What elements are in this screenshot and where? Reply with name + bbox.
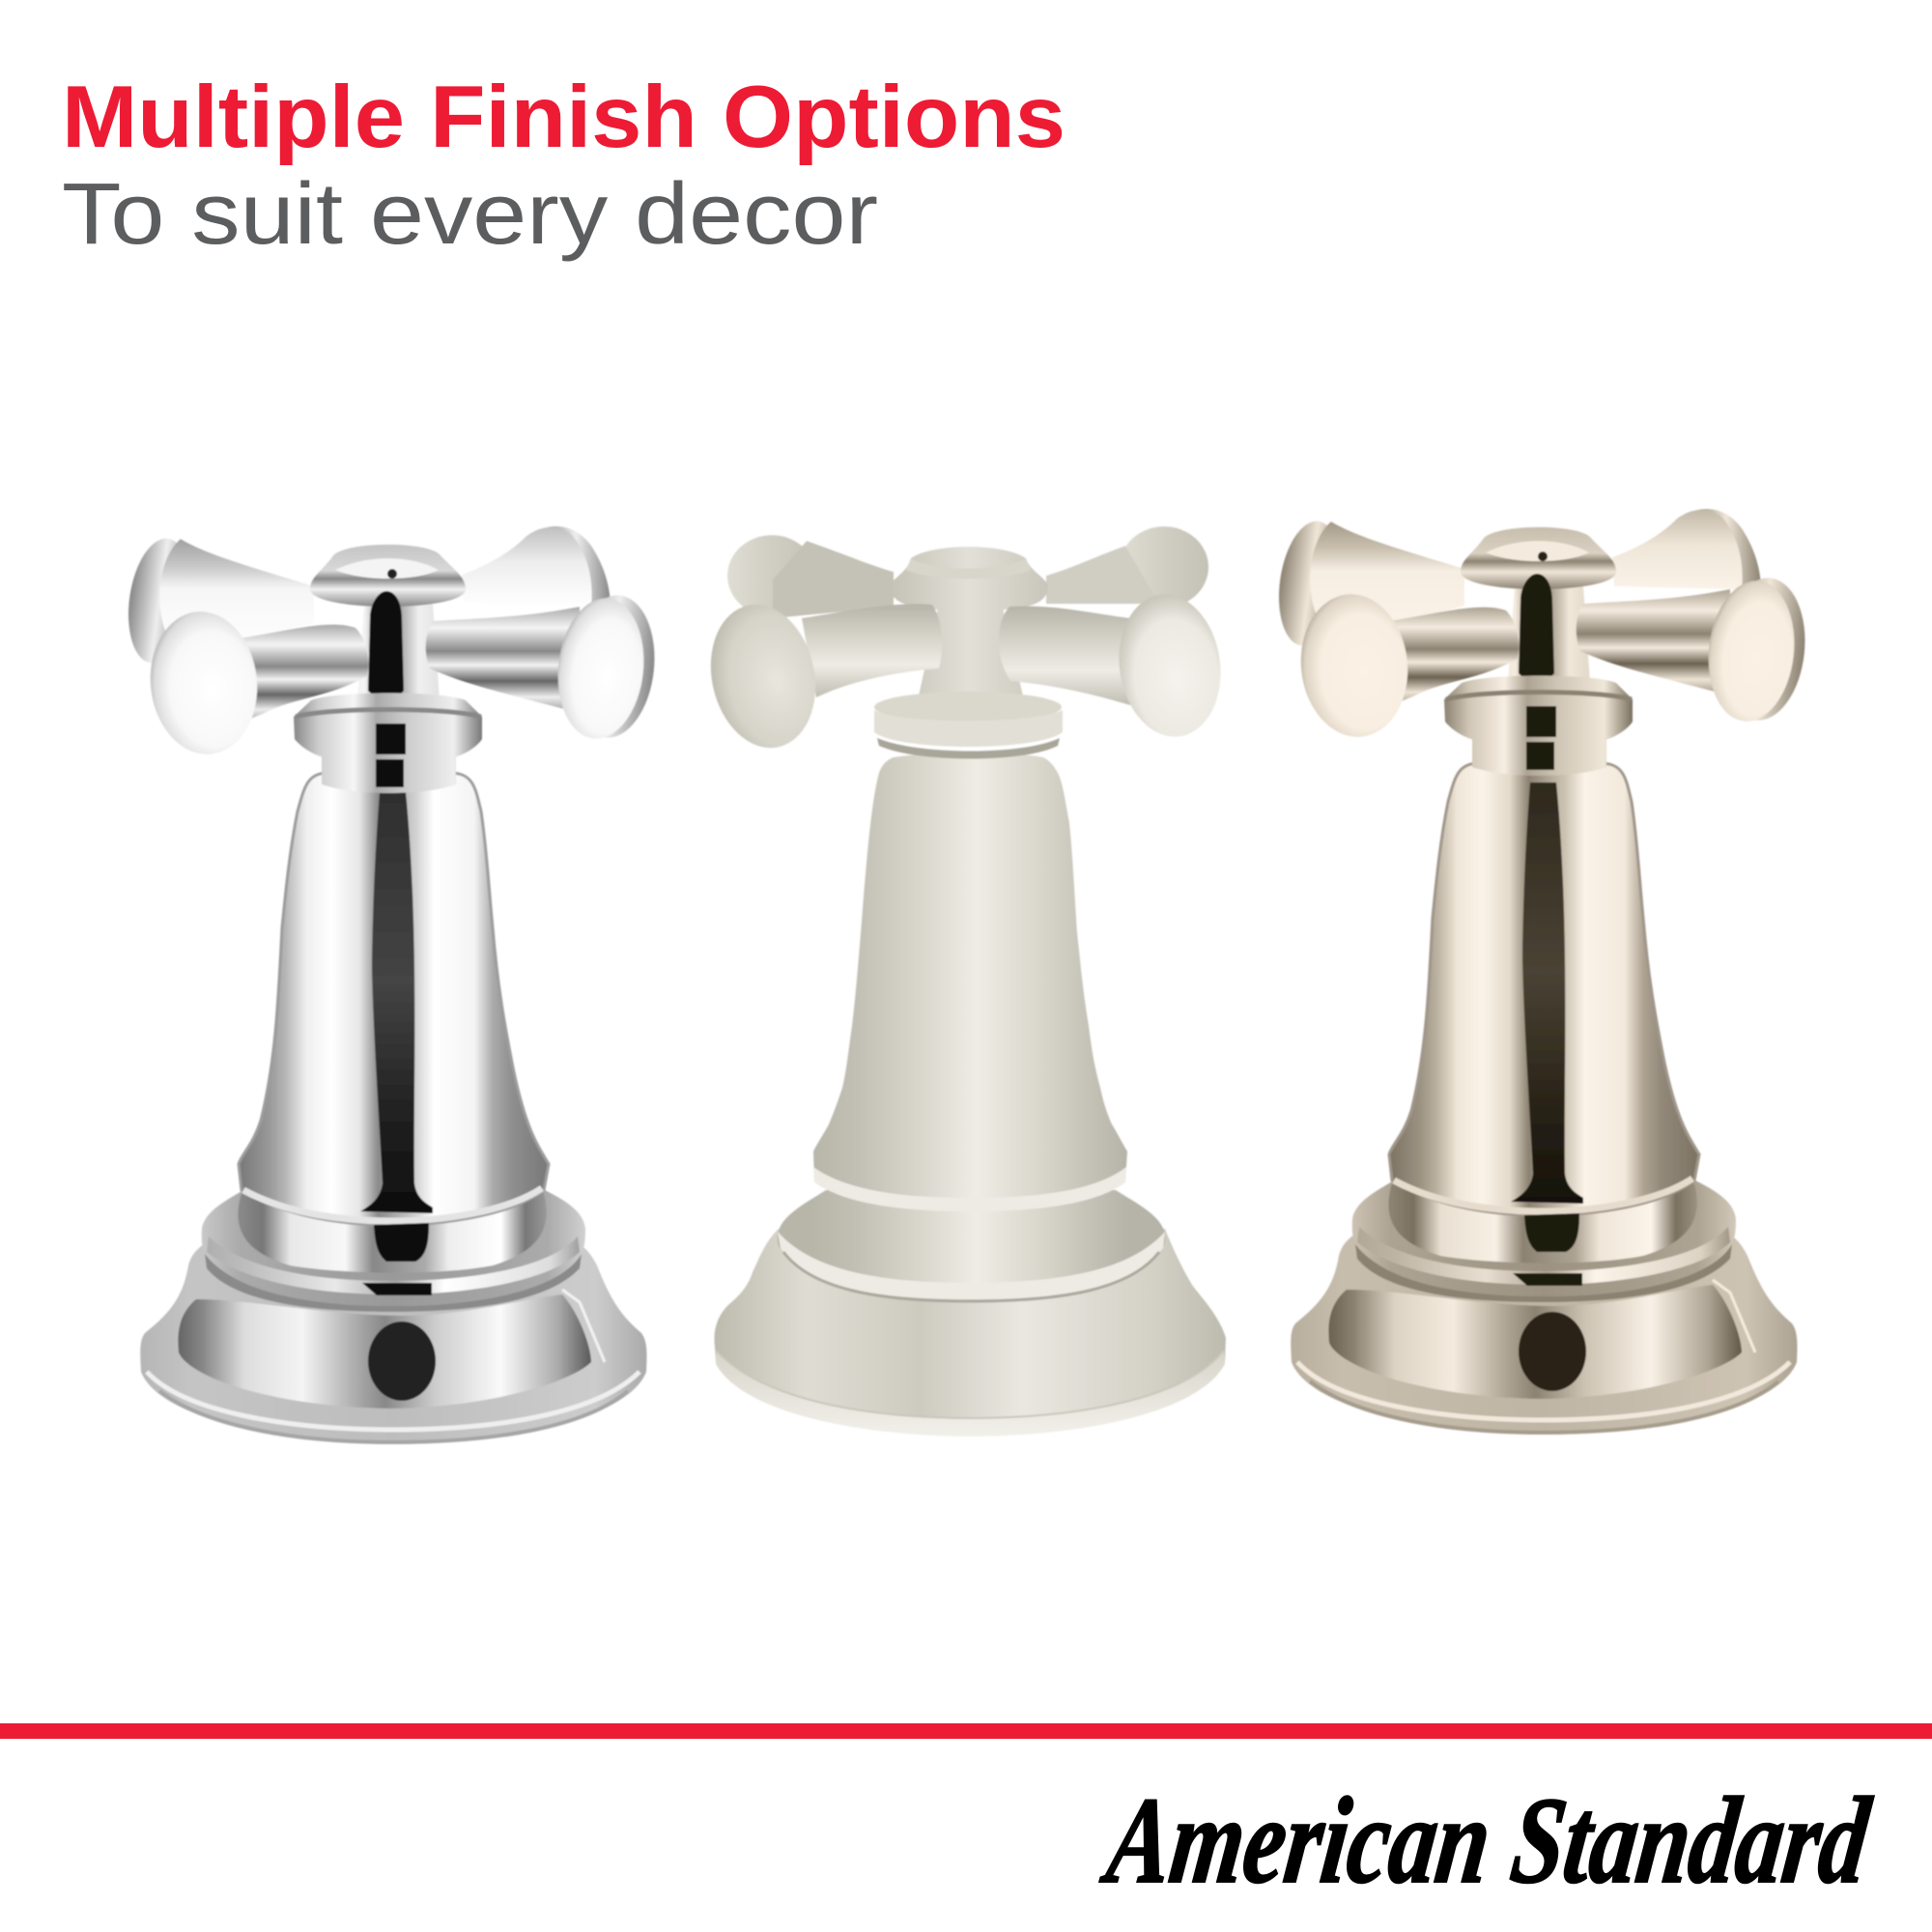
brushed bell body (813, 753, 1127, 1209)
brushed base (715, 1229, 1226, 1436)
brushed stepped collar (778, 1190, 1165, 1301)
chrome dark reflection stripe (360, 792, 436, 1401)
chrome body bright line (243, 1188, 542, 1221)
brushed left front arm (698, 595, 942, 757)
polished cross handle, translated from chrome geometry (1271, 509, 1811, 776)
brushed right front arm (999, 587, 1230, 744)
chrome collar rings (294, 694, 482, 793)
product: polished nickel cross handle (1271, 509, 1811, 1435)
chrome left front arm (144, 607, 368, 759)
product: chrome cross handle (121, 526, 661, 1444)
chrome base (140, 1241, 646, 1444)
brushed flange (874, 692, 1063, 759)
chrome left back arm (121, 534, 314, 668)
chrome bell body (239, 773, 549, 1225)
product: brushed nickel cross handle (698, 526, 1230, 1436)
title: Multiple Finish Options (62, 69, 1065, 166)
polished lower body, translated from chrome geometry (1291, 763, 1797, 1435)
subtitle: To suit every decor (62, 166, 878, 263)
red divider bar (0, 1723, 1932, 1739)
chrome right front arm (426, 591, 661, 743)
chrome right back arm (462, 526, 611, 607)
brushed body lower band (813, 1167, 1126, 1211)
brushed back arms (727, 526, 1208, 618)
chrome head, cap and hub (310, 545, 466, 700)
brushed head, cap and hub (890, 547, 1048, 700)
chrome stepped collar (202, 1188, 585, 1312)
